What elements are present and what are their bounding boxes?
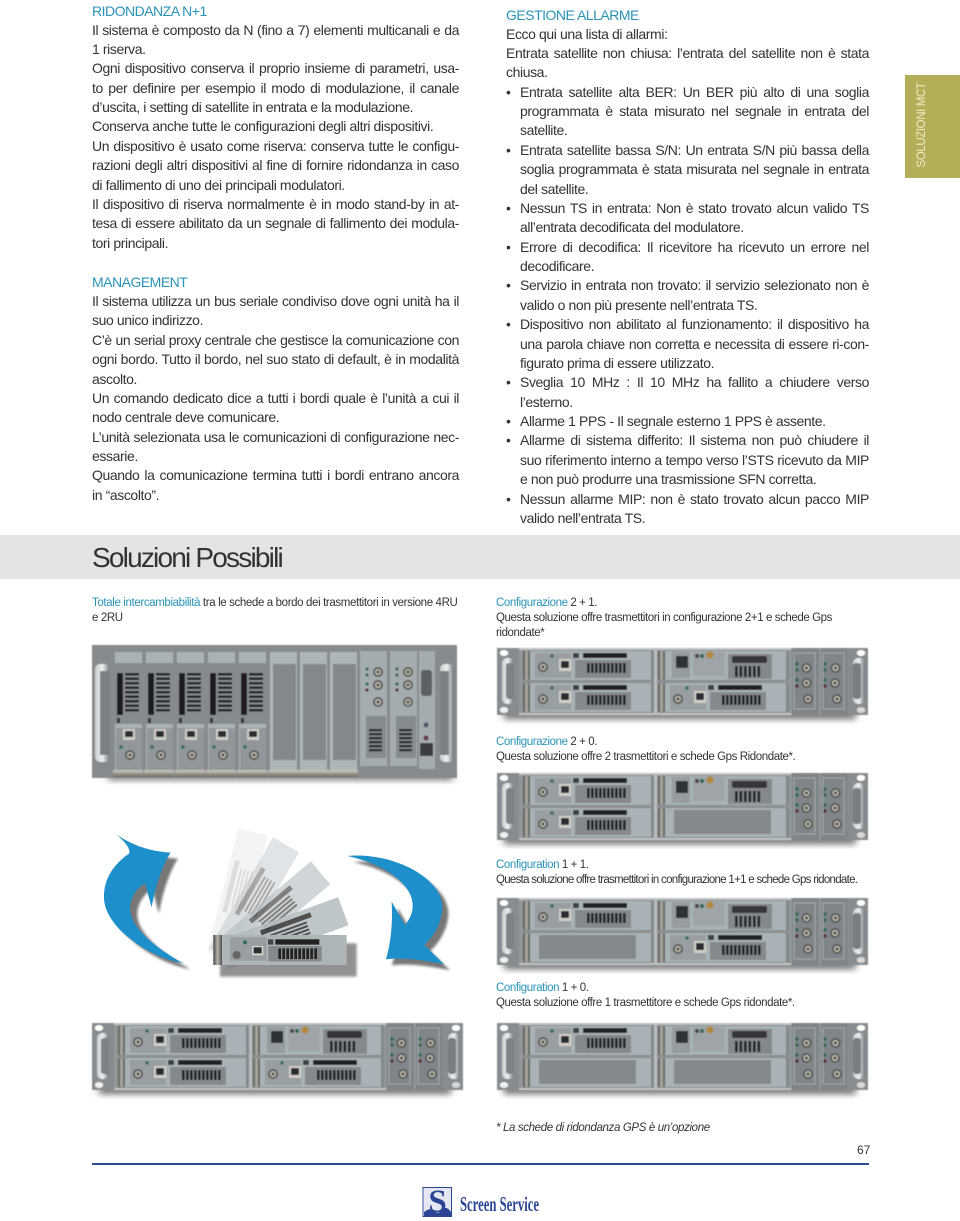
- footnote: * La schede di ridondanza GPS è un’opzione: [496, 1122, 710, 1134]
- text block: ridondanza: d’uscita, i setting di satellite in entrata e la modulazione.: [92, 99, 413, 115]
- text block: lista allarmi: programmata è stata misurato nel segnale in entrata del: [520, 103, 869, 119]
- text block: lista allarmi: [506, 26, 870, 526]
- text block: lista allarmi: valido nell’entrata TS.: [520, 510, 645, 526]
- text block: lista allarmi: Errore di decodifica: Il ricevitore ha ricevuto un errore nel: [520, 239, 869, 255]
- heading: Gestione allarme: GESTIONE ALLARME: [506, 7, 639, 23]
- caption: configuration 1+0: Questa soluzione offre 1 trasmettitore e schede Gps ridondate*.: [496, 997, 795, 1009]
- caption: configurazione 2+1: [496, 596, 832, 639]
- text block: management: ogni bordo. Tutto il bordo, nel suo stato di default, è in modalità: [92, 351, 459, 367]
- text block: management: ascolto.: [92, 370, 137, 386]
- rack configurazione 2+0: [497, 773, 868, 844]
- text block: lista allarmi: Sveglia 10 MHz : Il 10 MHz ha fallito a chiudere verso: [520, 374, 869, 390]
- section band: Soluzioni Possibili: Soluzioni Possibili: [92, 542, 282, 573]
- text block: lista allarmi: Entrata satellite bassa S/N: Un entrata S/N più bassa della: [520, 142, 869, 158]
- caption: intercambiabilità: e 2RU: [92, 612, 123, 624]
- text block: ridondanza: Il sistema è composto da N (fino a 7) elementi multicanali e da: [92, 22, 459, 38]
- text block: lista allarmi: Nessun allarme MIP: non è stato trovato alcun pacco MIP: [520, 490, 869, 506]
- text block: lista allarmi: suo riferimento interno a tempo verso l’STS ricevuto da MIP: [520, 452, 869, 468]
- text block: ridondanza: di fallimento di uno dei principali modulatori.: [92, 176, 345, 192]
- caption: configurazione 2+1: Configurazione 2 + 1.: [496, 596, 597, 608]
- text block: ridondanza: tori principali.: [92, 235, 168, 251]
- arrow right: [347, 856, 450, 970]
- side tab: Soluzioni MCT: SOLUZIONI MCT: [916, 83, 928, 167]
- text block: lista allarmi: Allarme di sistema differito: Il sistema non può chiudere il: [520, 432, 869, 448]
- caption: configurazione 2+0: [496, 736, 795, 763]
- caption: configurazione 2+0: Configurazione 2 + 0.: [496, 736, 597, 748]
- text block: lista allarmi: chiusa.: [506, 64, 548, 80]
- text block: lista allarmi: una parola chiave non corretta e necessita di essere ri-con-: [520, 336, 869, 352]
- caption: configurazione 2+0: Questa soluzione offre 2 trasmettitori e schede Gps Ridondate*.: [496, 751, 795, 763]
- rack configurazione 2+1: [497, 648, 868, 719]
- text block: lista allarmi: e non può produrre una trasmissione SFN corretta.: [520, 471, 816, 487]
- fan of module cards: [207, 828, 357, 977]
- text block: lista allarmi: l’esterno.: [520, 394, 573, 410]
- text block: management: Quando la comunicazione termina tutti i bordi entrano ancora: [92, 467, 459, 483]
- text block: lista allarmi: Nessun TS in entrata: Non è stato trovato alcun valido TS: [520, 200, 869, 216]
- text block: ridondanza: [92, 22, 460, 251]
- text block: management: in “ascolto”.: [92, 487, 159, 503]
- logo: Screen Service: [423, 1184, 539, 1220]
- text block: ridondanza: Ogni dispositivo conserva il proprio insieme di parametri, usa-: [92, 60, 459, 76]
- text block: lista allarmi: figurato prima di essere utilizzato.: [520, 355, 714, 371]
- caption: configuration 1+1: Configuration 1 + 1.: [496, 858, 588, 870]
- text block: management: L’unità selezionata usa le comunicazioni di configurazione nec-: [92, 429, 459, 445]
- arrow left: [104, 834, 191, 969]
- section band: Soluzioni Possibili: [0, 535, 960, 579]
- rack configuration 1+1: [497, 898, 868, 969]
- text block: management: nodo centrale deve comunicare.: [92, 409, 279, 425]
- text block: lista allarmi: del satellite.: [520, 180, 588, 196]
- text block: ridondanza: 1 riserva.: [92, 41, 146, 57]
- caption: configuration 1+0: [496, 982, 795, 1009]
- text block: lista allarmi: soglia programmata è stata misurata nel segnale in entrata: [520, 161, 869, 177]
- text block: ridondanza: Il dispositivo di riserva normalmente è in modo stand-by in at-: [92, 196, 459, 212]
- page number: 67: [857, 1143, 870, 1157]
- text block: lista allarmi: all’entrata decodificata del modulatore.: [520, 219, 744, 235]
- text block: lista allarmi: Allarme 1 PPS - Il segnale esterno 1 PPS è assente.: [520, 413, 826, 429]
- logo: Screen Service: S: [428, 1184, 447, 1220]
- text block: lista allarmi: Ecco qui una lista di allarmi:: [506, 26, 668, 42]
- text block: lista allarmi: Servizio in entrata non trovato: il servizio selezionato non è: [520, 277, 869, 293]
- caption: configuration 1+1: [496, 858, 857, 886]
- text block: ridondanza: razioni degli altri dispositivi al fine di fornire ridondanza in caso: [92, 157, 459, 173]
- text block: ridondanza: tesa di essere abilitato da un segnale di fallimento dei modula-: [92, 215, 459, 231]
- text block: lista allarmi: Entrata satellite non chiusa: l’entrata del satellite non è stata: [506, 45, 869, 61]
- text block: management: C’è un serial proxy centrale che gestisce la comunicazione con: [92, 332, 459, 348]
- heading: Ridondanza N+1: RIDONDANZA N+1: [92, 3, 207, 19]
- rack configuration 1+0: [497, 1023, 868, 1094]
- text block: management: [92, 293, 460, 503]
- caption: configuration 1+0: Configuration 1 + 0.: [496, 982, 588, 994]
- text block: management: suo unico indirizzo.: [92, 312, 203, 328]
- rack 4RU: [92, 645, 457, 780]
- rack bottom left: [92, 1023, 463, 1094]
- text block: lista allarmi: Dispositivo non abilitato al funzionamento: il dispositivo ha: [520, 316, 869, 332]
- logo: Screen Service: Screen Service: [460, 1192, 539, 1216]
- text block: lista allarmi: Entrata satellite alta BER: Un BER più alto di una soglia: [520, 84, 869, 100]
- caption: configurazione 2+1: ridondate*: [496, 627, 544, 639]
- text block: lista allarmi: valido o non più presente nell’entrata TS.: [520, 297, 757, 313]
- text block: lista allarmi: decodificare.: [520, 258, 594, 274]
- caption: intercambiabilità: [92, 596, 457, 624]
- text block: ridondanza: to per definire per esempio il modo di modulazione, il canale: [92, 80, 459, 96]
- text block: management: essarie.: [92, 448, 138, 464]
- footer rule: [92, 1163, 869, 1165]
- caption: configuration 1+1: Questa soluzione offre trasmettitori in configurazione 1+1 e schede Gps ridondate.: [496, 874, 857, 886]
- text block: lista allarmi: satellite.: [520, 122, 567, 138]
- text block: ridondanza: Conserva anche tutte le configurazioni degli altri dispositivi.: [92, 118, 433, 134]
- side tab: Soluzioni MCT: [905, 75, 960, 178]
- caption: intercambiabilità: Totale intercambiabilità tra le schede a bordo dei trasmettitori in versione 4RU: [92, 596, 457, 608]
- text block: management: Il sistema utilizza un bus seriale condiviso dove ogni unità ha il: [92, 293, 459, 309]
- text block: management: Un comando dedicato dice a tutti i bordi quale è l’unità a cui il: [92, 390, 459, 406]
- text block: ridondanza: Un dispositivo è usato come riserva: conserva tutte le configu-: [92, 138, 459, 154]
- heading: Management: MANAGEMENT: [92, 274, 187, 290]
- caption: configurazione 2+1: Questa soluzione offre trasmettitori in configurazione 2+1 e schede Gps: [496, 612, 832, 624]
